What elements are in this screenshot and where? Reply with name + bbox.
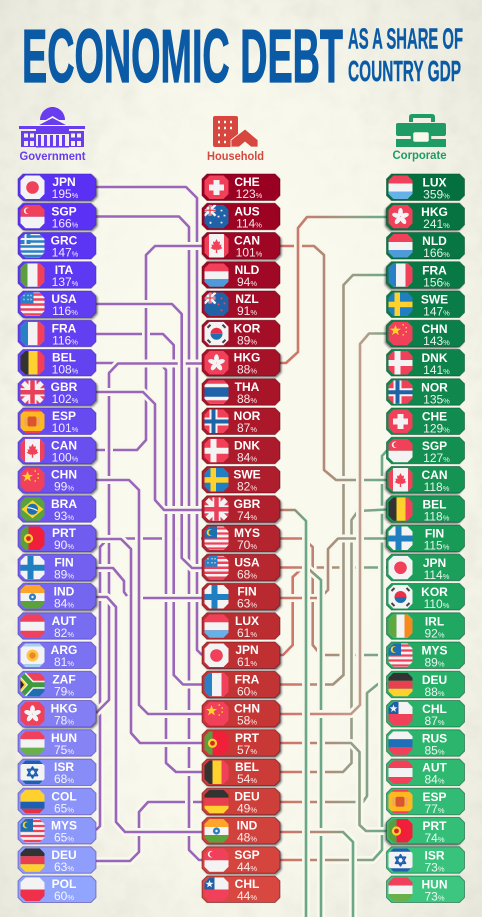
pill: FRA 60%: FRA xyxy=(235,672,260,686)
pill: MYS 89%: 89% xyxy=(424,656,445,670)
connector lines: household to corporate xyxy=(279,217,387,917)
pill: AUS 114% xyxy=(202,203,280,230)
pill: IND 48% xyxy=(202,818,282,846)
pill: AUT 82%: 82% xyxy=(54,626,74,640)
pill: FRA 156%: FRA xyxy=(422,263,447,277)
pill: SWE 147% xyxy=(386,291,464,318)
icon: household buildings xyxy=(213,116,258,147)
pill: HUN 75%: 75% xyxy=(54,743,74,757)
pill: CHE 129%: 129% xyxy=(423,422,450,436)
line: HKG corporate xyxy=(279,217,387,363)
pill: AUT 82%: AUT xyxy=(52,614,77,628)
line: CHN xyxy=(96,480,202,714)
pill: CHL 87% xyxy=(386,700,464,728)
pill: DEU 49%: DEU xyxy=(234,789,260,803)
pill: POL 60% xyxy=(18,876,96,903)
pill: KOR 110%: 110% xyxy=(424,597,450,611)
pill: JPN 195% xyxy=(18,174,98,202)
pill: NZL 91%: NZL xyxy=(235,292,259,306)
pill: DNK 84%: 84% xyxy=(237,450,257,464)
pill: NLD 94%: 94% xyxy=(237,275,257,289)
pill: PRT 90%: PRT xyxy=(52,526,77,540)
pill: FRA 156% xyxy=(385,262,464,290)
panel: household column xyxy=(202,174,282,903)
pill: IRL 92%: 92% xyxy=(424,626,445,640)
pill: NOR 135%: NOR xyxy=(421,380,448,394)
pill: JPN 61% xyxy=(202,642,282,670)
line: DEU corporate xyxy=(279,684,387,802)
pill: IND 48%: IND xyxy=(237,818,258,832)
pill: JPN 61%: 61% xyxy=(237,655,257,669)
pill: JPN 114%: JPN xyxy=(423,556,446,570)
pill: GRC 147%: 147% xyxy=(52,246,79,260)
pill: CHL 44%: 44% xyxy=(237,889,257,903)
pill: RUS 85% xyxy=(386,730,464,757)
pill: THA 88%: THA xyxy=(235,380,260,394)
panel: corporate column xyxy=(385,174,464,904)
pill: ITA 137% xyxy=(18,262,96,289)
pill: SGP 166%: SGP xyxy=(51,204,77,218)
pill: BRA 93%: BRA xyxy=(51,497,77,511)
pill: CHE 129% xyxy=(386,408,464,436)
pill: CAN 101%: 101% xyxy=(236,246,263,260)
line: PRT corporate xyxy=(279,743,387,831)
pill: CHN 99% xyxy=(18,466,98,494)
pill: ITA 137%: 137% xyxy=(52,275,79,289)
pill: HUN 75%: HUN xyxy=(51,731,77,745)
pill: USA 68%: 68% xyxy=(237,567,257,581)
pill: HKG 88% xyxy=(202,350,282,378)
pill: FIN 115%: FIN xyxy=(425,526,444,540)
pill: SWE 82%: SWE xyxy=(233,468,261,482)
pill: ESP 101%: 101% xyxy=(52,421,79,435)
pill: KOR 89%: KOR xyxy=(234,321,261,335)
pill: ISR 73%: 73% xyxy=(424,860,445,874)
pill: FIN 115% xyxy=(385,525,464,553)
pill: SGP 44%: SGP xyxy=(234,848,260,862)
pill: KOR 89% xyxy=(202,320,280,347)
line: MYS corporate xyxy=(279,538,387,655)
pill: DEU 49% xyxy=(202,788,282,816)
icon: government building xyxy=(19,107,85,148)
pill: PRT 57%: 57% xyxy=(237,743,257,757)
pill: DEU 63% xyxy=(18,847,96,874)
pill: NZL 91%: 91% xyxy=(237,304,257,318)
pill: CAN 100% xyxy=(18,437,98,465)
pill: CAN 118%: 118% xyxy=(424,480,450,494)
pill: NZL 91% xyxy=(202,291,280,318)
pill: MYS 70%: 70% xyxy=(237,538,257,552)
pill: ESP 77%: ESP xyxy=(422,790,447,804)
pill: CHE 123% xyxy=(202,174,280,201)
line: CAN corporate xyxy=(279,246,387,480)
line: FRA xyxy=(96,334,202,684)
pill: HKG 88%: 88% xyxy=(237,362,257,376)
pill: THA 88% xyxy=(202,379,280,406)
pill: ARG 81%: 81% xyxy=(54,655,74,669)
pill: CAN 118% xyxy=(385,466,464,494)
pill: DNK 84%: DNK xyxy=(234,438,260,452)
pill: NLD 166%: NLD xyxy=(422,234,447,248)
pill: LUX 61% xyxy=(202,613,280,640)
pill: FRA 60%: 60% xyxy=(237,684,257,698)
line: DEU xyxy=(96,802,202,861)
pill: LUX 359% xyxy=(386,174,464,202)
pill: ZAF 79% xyxy=(18,671,96,698)
pill: AUT 84% xyxy=(386,759,464,786)
pill: MYS 65%: MYS xyxy=(51,818,77,832)
line: JPN xyxy=(96,187,202,655)
pill: DNK 141% xyxy=(386,350,464,377)
line: CAN xyxy=(96,246,202,450)
pill: ESP 77% xyxy=(386,788,464,816)
pill: IRL 92%: IRL xyxy=(425,614,444,628)
pill: CHN 99%: CHN xyxy=(51,468,77,482)
pill: IND 84% xyxy=(18,584,98,612)
pill: PRT 74%: 74% xyxy=(424,831,445,845)
line: IND corporate xyxy=(279,832,353,917)
pill: ZAF 79%: ZAF xyxy=(52,672,76,686)
pill: AUT 84%: 84% xyxy=(424,772,445,786)
pill: NLD 94%: NLD xyxy=(235,263,260,277)
pill: LUX 359%: 359% xyxy=(423,188,450,202)
pill: NLD 94% xyxy=(202,262,280,289)
pill: IND 84%: 84% xyxy=(54,596,74,610)
pill: CAN 100%: CAN xyxy=(51,438,77,452)
pill: JPN 61%: JPN xyxy=(235,643,259,657)
pill: PRT 74% xyxy=(385,818,464,846)
pill: SWE 147%: SWE xyxy=(421,292,448,306)
pill: MYS 89% xyxy=(386,642,464,670)
pill: DEU 49%: 49% xyxy=(237,801,257,815)
pill: SGP 127%: SGP xyxy=(422,439,447,453)
line: BEL corporate xyxy=(279,510,387,772)
pill: BEL 54% xyxy=(202,759,282,787)
pill: CAN 100%: 100% xyxy=(52,450,79,464)
pill: PRT 90% xyxy=(18,525,98,553)
pill: JPN 114%: 114% xyxy=(424,568,450,582)
pill: HUN 73%: HUN xyxy=(422,878,448,892)
pill: DEU 88% xyxy=(386,671,464,699)
pill: LUX 61%: LUX xyxy=(235,614,259,628)
pill: ESP 77%: 77% xyxy=(424,802,445,816)
pill: GRC 147%: GRC xyxy=(51,234,78,248)
pill: IND 84%: IND xyxy=(54,584,75,598)
pill: HKG 78%: 78% xyxy=(54,714,74,728)
pill: HKG 241% xyxy=(385,203,464,231)
pill: BRA 93%: 93% xyxy=(54,509,74,523)
pill: KOR 110% xyxy=(386,584,464,611)
line: GBR corporate xyxy=(279,510,306,917)
pill: MYS 65% xyxy=(18,818,96,844)
heading: government: Government xyxy=(20,149,86,163)
pill: ISR 68%: ISR xyxy=(54,760,74,774)
pill: POL 60%: POL xyxy=(52,877,76,891)
pill: BEL 108%: 108% xyxy=(52,362,79,376)
panel: government column xyxy=(18,174,98,903)
pill: MYS 65%: 65% xyxy=(54,830,74,844)
line: USA xyxy=(96,304,202,568)
pill: LUX 61%: 61% xyxy=(237,626,257,640)
pill: HKG 241%: HKG xyxy=(421,205,448,219)
pill: SGP 44%: 44% xyxy=(237,860,257,874)
pill: LUX 359%: LUX xyxy=(422,176,446,190)
pill: DNK 84% xyxy=(202,437,280,464)
pill: NLD 166% xyxy=(386,232,464,260)
title xyxy=(22,14,463,98)
pill: MYS 89%: MYS xyxy=(421,644,448,658)
pill: SGP 166%: 166% xyxy=(52,216,79,230)
pill: NOR 87%: 87% xyxy=(237,421,257,435)
pill: CHL 44% xyxy=(202,876,280,903)
pill: ARG 81% xyxy=(18,642,96,669)
pill: PRT 57%: PRT xyxy=(235,731,260,745)
pill: SGP 127% xyxy=(386,437,464,465)
pill: HKG 78% xyxy=(18,700,98,728)
pill: BEL 54%: 54% xyxy=(237,772,257,786)
pill: AUT 84%: AUT xyxy=(422,760,447,774)
pill: DEU 63%: 63% xyxy=(54,860,74,874)
pill: POL 60%: 60% xyxy=(54,889,74,903)
pill: BRA 93% xyxy=(18,496,96,523)
pill: BEL 118%: BEL xyxy=(422,497,446,511)
pill: ISR 68%: 68% xyxy=(54,772,74,786)
pill: AUS 114%: AUS xyxy=(234,204,260,218)
line: BEL xyxy=(96,363,202,772)
line: IND xyxy=(96,597,202,832)
pill: BEL 108%: BEL xyxy=(52,350,76,364)
pill: FIN 89%: FIN xyxy=(54,555,74,569)
line: GBR xyxy=(96,392,202,510)
pill: AUS 114%: 114% xyxy=(236,216,262,230)
pill: USA 68%: USA xyxy=(234,555,260,569)
pill: COL 65%: 65% xyxy=(54,801,74,815)
pill: FRA 156%: 156% xyxy=(423,275,450,289)
pill: CHE 123%: CHE xyxy=(234,175,260,189)
line: SGP corporate xyxy=(279,450,387,860)
pill: DNK 141%: 141% xyxy=(423,363,450,377)
pill: FIN 63% xyxy=(202,584,282,612)
pill: CHN 99%: 99% xyxy=(54,480,74,494)
pill: SGP 166% xyxy=(18,203,98,231)
pill: NOR 87% xyxy=(202,408,280,435)
pill: DEU 88%: 88% xyxy=(424,685,445,699)
pill: CHL 87%: CHL xyxy=(422,702,447,716)
pill: JPN 195%: 195% xyxy=(52,187,79,201)
pill: BEL 118%: 118% xyxy=(424,509,450,523)
pill: MYS 70% xyxy=(202,525,282,553)
pill: IRL 92% xyxy=(386,613,464,640)
pill: ISR 68% xyxy=(18,759,96,786)
pill: SGP 127%: 127% xyxy=(423,451,450,465)
pill: ZAF 79%: 79% xyxy=(54,684,74,698)
pill: CHE 129%: CHE xyxy=(422,410,447,424)
pill: FRA 116% xyxy=(18,320,96,347)
line: MYS xyxy=(96,538,202,830)
pill: COL 65% xyxy=(18,788,96,815)
pill: GRC 147% xyxy=(18,232,96,260)
pill: CHN 143%: 143% xyxy=(423,334,450,348)
line: HKG xyxy=(96,364,202,713)
pill: PRT 74%: PRT xyxy=(422,819,447,833)
pill: FIN 89% xyxy=(18,554,98,582)
line: FIN xyxy=(96,568,202,598)
line: JPN corporate xyxy=(279,568,387,655)
pill: DEU 63%: DEU xyxy=(51,848,77,862)
pill: DEU 88%: DEU xyxy=(422,673,447,687)
pill: CAN 101%: CAN xyxy=(234,234,260,248)
pill: PRT 90%: 90% xyxy=(54,538,74,552)
pill: NOR 87%: NOR xyxy=(234,409,261,423)
pill: HKG 88%: HKG xyxy=(234,350,260,364)
pill: MYS 70%: MYS xyxy=(234,526,260,540)
pill: NOR 135%: 135% xyxy=(423,392,450,406)
pill: CHE 123%: 123% xyxy=(236,187,263,201)
pill: FIN 89%: 89% xyxy=(54,567,74,581)
pill: FIN 63%: FIN xyxy=(237,584,257,598)
pill: GBR 102% xyxy=(18,379,98,407)
pill: SGP 44% xyxy=(202,847,282,875)
line: PRT xyxy=(96,539,202,743)
line: SGP xyxy=(96,216,202,860)
line: CHN corporate xyxy=(279,334,387,714)
line: USA corporate xyxy=(279,568,321,917)
pill: GBR 74% xyxy=(202,496,282,524)
line: FRA corporate xyxy=(279,275,387,684)
pill: AUT 82% xyxy=(18,613,96,640)
pill: GBR 102%: GBR xyxy=(51,380,78,394)
pill: GBR 74%: GBR xyxy=(234,497,261,511)
pill: CHL 44%: CHL xyxy=(235,877,259,891)
pill: BEL 108% xyxy=(18,350,96,376)
pill: JPN 114% xyxy=(386,554,464,582)
pill: FRA 116%: 116% xyxy=(52,333,78,347)
pill: DNK 141%: DNK xyxy=(422,351,448,365)
pill: HUN 75% xyxy=(18,730,96,757)
pill: CHN 58%: 58% xyxy=(237,714,257,728)
pill: USA 116%: 116% xyxy=(52,304,78,318)
pill: CHL 87%: 87% xyxy=(424,714,445,728)
connector lines: government to household xyxy=(96,187,202,861)
pill: NLD 166%: 166% xyxy=(423,246,450,260)
pill: HUN 73%: 73% xyxy=(424,890,445,904)
pill: USA 116% xyxy=(18,291,98,319)
pill: CAN 101% xyxy=(202,232,282,260)
line: FIN corporate xyxy=(279,538,387,598)
pill: FIN 63%: 63% xyxy=(237,596,257,610)
pill: ISR 73% xyxy=(386,847,464,874)
pill: FIN 115%: 115% xyxy=(424,538,450,552)
pill: ISR 73%: ISR xyxy=(424,848,445,862)
pill: GBR 74%: 74% xyxy=(237,509,257,523)
pill: ITA 137%: ITA xyxy=(55,263,74,277)
pill: CAN 118%: CAN xyxy=(422,468,448,482)
pill: HKG 78%: HKG xyxy=(51,702,77,716)
pill: USA 116%: USA xyxy=(51,292,77,306)
pill: CHN 143%: CHN xyxy=(422,322,448,336)
pill: GBR 102%: 102% xyxy=(52,392,79,406)
pill: ARG 81%: ARG xyxy=(51,643,77,657)
pill: FRA 116%: FRA xyxy=(52,321,77,335)
pill: COL 65%: COL xyxy=(51,789,77,803)
pill: CHN 143% xyxy=(385,320,464,348)
pill: PRT 57% xyxy=(202,730,282,758)
pill: JPN 195%: JPN xyxy=(52,175,76,189)
pill: USA 68% xyxy=(202,554,282,582)
pill: IND 48%: 48% xyxy=(237,830,257,844)
pill: KOR 110%: KOR xyxy=(421,585,448,599)
pill: SWE 147%: 147% xyxy=(423,304,450,318)
pill: THA 88%: 88% xyxy=(237,392,257,406)
pill: KOR 89%: 89% xyxy=(237,333,257,347)
pill: CHN 58%: CHN xyxy=(234,702,260,716)
pill: BEL 54%: BEL xyxy=(235,760,259,774)
heading: household: Household xyxy=(207,149,264,163)
icon: corporate briefcase xyxy=(396,114,446,147)
pill: RUS 85%: 85% xyxy=(424,743,445,757)
pill: ESP 101%: ESP xyxy=(52,409,76,423)
pill: BEL 118% xyxy=(385,496,464,524)
heading: corporate: Corporate xyxy=(392,148,447,162)
pill: SWE 82%: 82% xyxy=(237,480,257,494)
pill: RUS 85%: RUS xyxy=(422,731,447,745)
pill: CHN 58% xyxy=(202,700,282,728)
pill: HUN 73% xyxy=(386,876,464,904)
pill: FRA 60% xyxy=(202,671,282,699)
pill: NOR 135% xyxy=(386,379,464,406)
pill: ESP 101% xyxy=(18,408,96,435)
pill: SWE 82% xyxy=(202,466,280,494)
pill: HKG 241%: 241% xyxy=(423,217,450,231)
